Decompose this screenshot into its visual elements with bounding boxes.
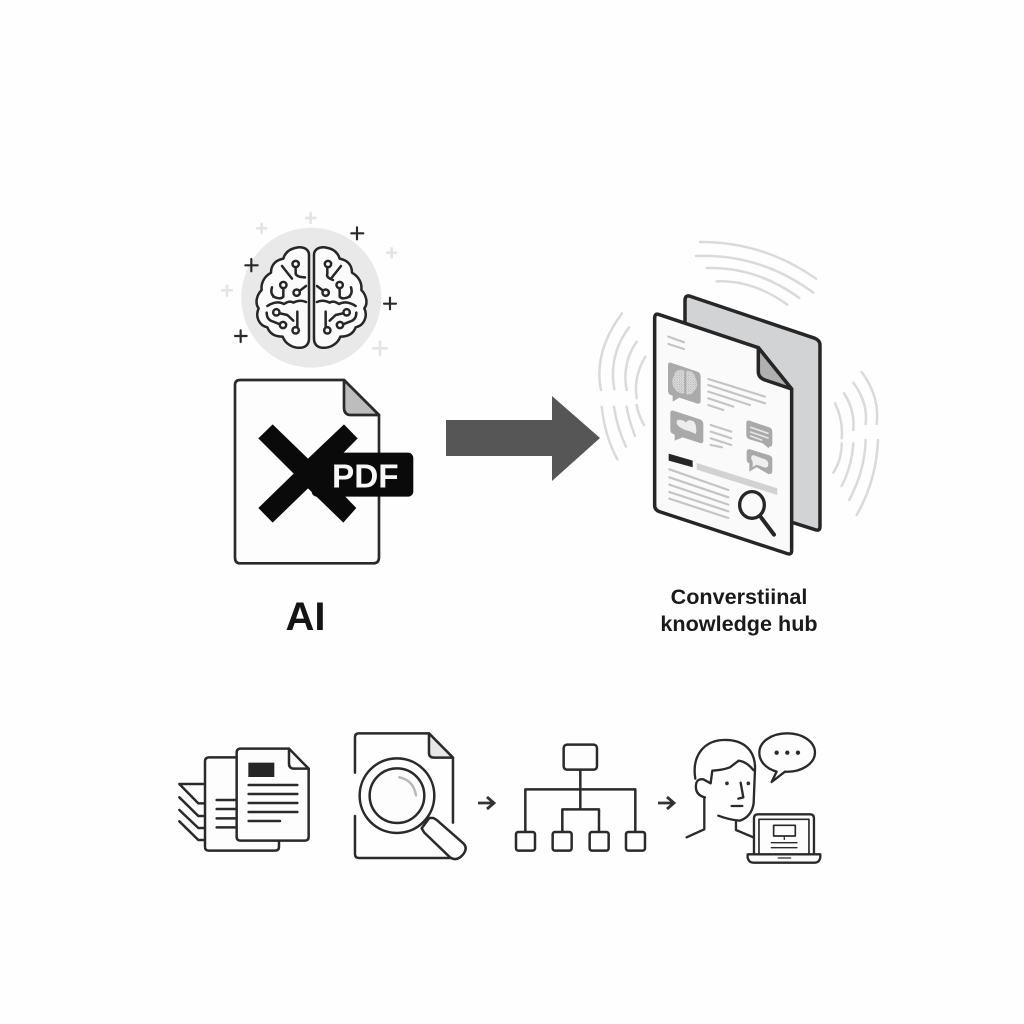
small arrow one: [478, 797, 494, 809]
brain background circle: [241, 228, 381, 368]
PDF label: PDF: [332, 458, 399, 495]
sound waves: [599, 242, 878, 515]
magnifier: [740, 492, 774, 535]
icon: document stack: [179, 749, 309, 851]
speech bubble: [759, 733, 815, 782]
sparkles: [235, 227, 396, 342]
brain icon with sparkles: [222, 213, 396, 368]
brain hemispheres: [257, 247, 366, 348]
main arrow: [446, 396, 600, 481]
crossed out PDF document: [235, 380, 413, 563]
page fold: [429, 733, 453, 758]
icon: hierarchy tree: [516, 745, 645, 851]
small chat tile: [747, 449, 772, 474]
dark bar: [669, 454, 693, 467]
small note tile: [746, 421, 772, 448]
brain chat tile: [668, 363, 701, 404]
black cross: [258, 424, 358, 523]
stacked sheets: [179, 784, 204, 840]
document fold: [344, 380, 379, 415]
face details: [732, 783, 743, 806]
rear page: [205, 757, 279, 851]
conversational document stack: [599, 242, 878, 554]
laptop: [754, 814, 814, 854]
text lines one: [708, 379, 765, 410]
head: [687, 740, 755, 837]
front sheet: [655, 314, 792, 554]
text lines three: [669, 469, 728, 518]
AI label: AI: [286, 595, 326, 639]
PDF badge: [312, 453, 413, 497]
handle: [422, 818, 466, 859]
small arrow two: [658, 797, 674, 809]
sheet fold: [758, 348, 792, 389]
back sheet: [685, 296, 820, 530]
hub caption: Converstiinal: [671, 584, 807, 609]
front page: [237, 749, 309, 841]
hub caption: [660, 584, 818, 636]
header lines: [668, 337, 684, 349]
lens: [360, 758, 434, 833]
text lines two: [711, 425, 731, 447]
icon: document magnifier: [355, 733, 466, 859]
speech tile: [670, 411, 703, 443]
icon: person with laptop and speech bubble: [687, 733, 820, 863]
page: [355, 733, 453, 858]
faint sparkles: [222, 213, 396, 355]
hub caption: knowledge hub: [660, 611, 818, 636]
document outline: [235, 380, 379, 563]
grey bar: [697, 463, 777, 495]
